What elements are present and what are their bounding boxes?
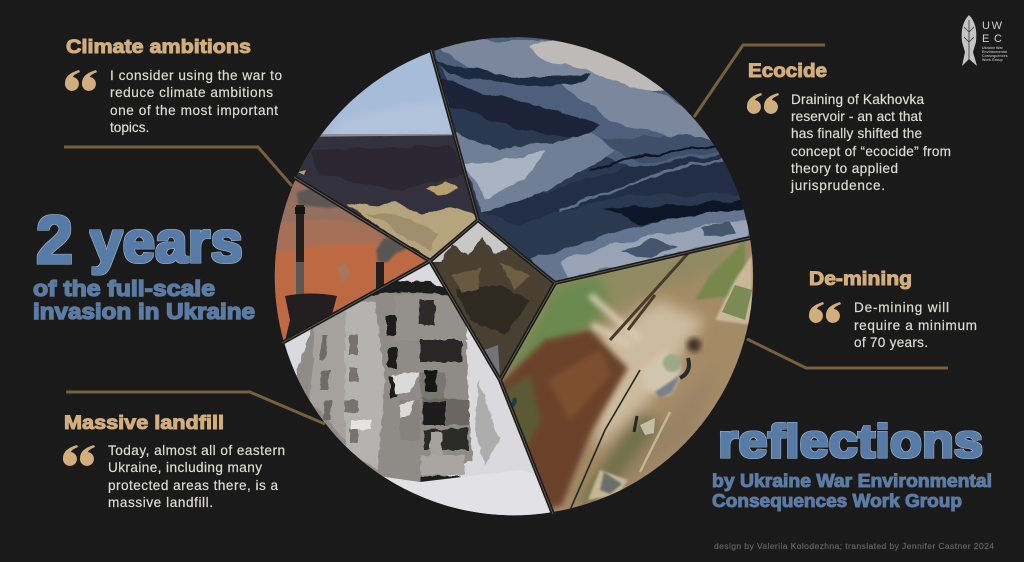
quote text: climate ambitions: reduce climate ambitions [110,85,273,100]
quote text: ecocide: has finally shifted the [791,126,922,141]
quote text: de-mining: of 70 years. [854,335,928,350]
block: climate ambitions [65,36,282,135]
callout line: ecocide [694,45,825,117]
title: 2 years of the full-scale invasion [33,202,255,324]
logo: UWEC feather [962,15,1008,66]
quote text: massive landfill: protected areas there, is a [108,478,278,493]
quote text: climate ambitions: topics. [110,120,149,135]
logo: UWEC feather: E C [982,33,1002,45]
quote text: climate ambitions: one of the most important [110,103,278,118]
logo: UWEC feather: Environmental [982,50,1007,54]
quote text: de-mining: require a minimum [854,318,977,333]
quote text: massive landfill: Today, almost all of eastern [108,443,285,458]
quote text: climate ambitions: I consider using the war to [110,68,282,83]
icon: quote mark [65,70,97,91]
quote text: massive landfill: massive landfill. [108,495,213,510]
wedge dividers [282,50,750,514]
logo: UWEC feather: Consequences [982,54,1008,58]
callout line: de-mining [747,339,948,368]
photo: aerial view of crater field [495,235,760,520]
icon: quote mark [63,445,95,466]
photo: sky and burnt field [296,52,476,258]
photo: power plant chimneys at sunset [274,180,426,340]
quote text: massive landfill: Ukraine, including many [108,460,262,475]
title: reflections by work group [712,415,992,511]
callout line: climate ambitions [64,147,292,186]
photo: water of drained reservoir [434,37,750,281]
title: 2 years of the full-scale invasion: 2 [36,202,73,278]
title: reflections by work group: by Ukraine War Environmental [712,471,992,491]
block: ecocide [747,60,951,193]
icon: quote mark [809,302,841,323]
photo: small forest wedge [432,222,552,376]
heading: massive landfill: Massive landfill [64,412,224,434]
quote text: de-mining [854,300,977,350]
logo: UWEC feather: Ukraine War [982,46,1003,50]
quote text: ecocide: jurisprudence. [790,178,885,193]
block: massive landfill [63,412,285,510]
quote text: ecocide: Draining of Kakhovka [791,92,924,107]
callout line: massive landfill [66,392,325,424]
logo: UWEC feather: U W [982,20,1003,32]
title: 2 years of the full-scale invasion: years [90,210,243,275]
icon: quote mark [747,93,779,114]
title: reflections by work group: Consequences Work Group [712,491,962,511]
quote text: climate ambitions [110,68,282,135]
logo: UWEC feather: Work Group [982,58,1004,62]
quote text: ecocide: reservoir - an act that [791,109,922,124]
heading: de-mining: De-mining [809,268,912,290]
title: 2 years of the full-scale invasion: invasion in Ukraine [33,299,255,324]
block: de-mining [809,268,977,350]
title: 2 years of the full-scale invasion: of the full-scale [33,276,215,301]
heading: ecocide: Ecocide [748,60,827,82]
heading: climate ambitions: Climate ambitions [66,36,251,58]
photo circle [270,30,760,520]
quote text: de-mining: De-mining will [854,300,949,315]
quote text: ecocide: concept of “ecocide” from [791,144,951,159]
quote text: massive landfill [108,443,285,510]
quote text: ecocide [790,92,951,193]
quote text: ecocide: theory to applied [791,161,898,176]
photo: destroyed apartment building [284,264,550,516]
title: reflections by work group: reflections [718,415,983,467]
credits: design by Valeriia Kolodezhna; translated by Jennifer Castner 2024 [714,541,994,551]
